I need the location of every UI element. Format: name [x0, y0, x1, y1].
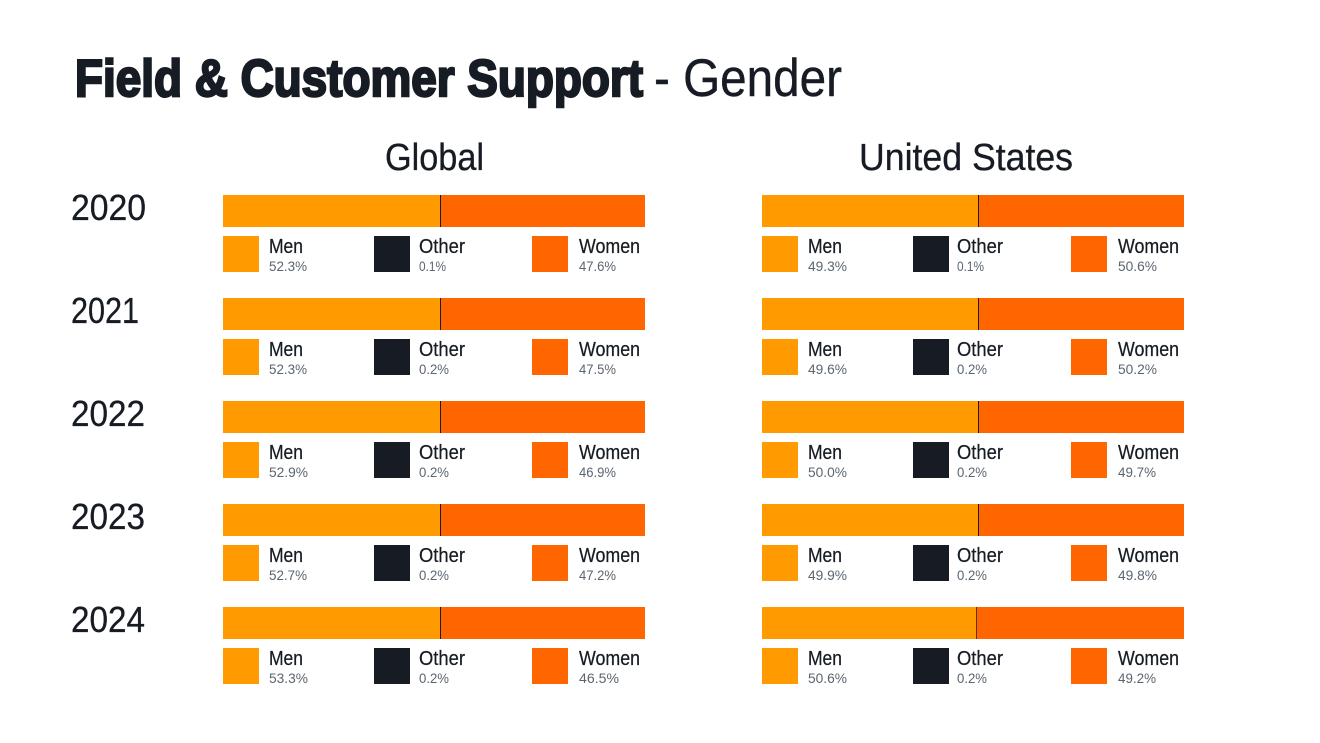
legend: Women: Women	[1118, 442, 1179, 464]
legend: Women	[1071, 339, 1179, 377]
legend: Men: 53.3%	[269, 670, 308, 686]
legend: Other	[913, 236, 1003, 274]
year label 2020: 2020	[71, 187, 146, 228]
stacked bar	[223, 298, 645, 330]
legend: Women	[532, 339, 640, 377]
legend: Other	[913, 339, 1003, 377]
legend: Women: Women	[1118, 236, 1179, 258]
legend: Other: Other	[957, 648, 1003, 670]
legend: Other	[374, 442, 465, 480]
legend: Men	[762, 545, 847, 583]
legend: Women: Women	[579, 236, 640, 258]
legend: Women: 49.8%	[1118, 567, 1157, 583]
legend: Men	[223, 648, 308, 686]
legend: Women: 46.5%	[579, 670, 619, 686]
stacked bar	[762, 504, 1184, 536]
legend: Other: Other	[957, 442, 1003, 464]
legend: Other: 0.1%	[419, 258, 446, 274]
legend: Men: 49.9%	[808, 567, 847, 583]
panel: Global 2022	[223, 401, 645, 480]
legend: Women: Women	[1118, 545, 1179, 567]
legend: Other: 0.2%	[957, 567, 987, 583]
legend: Men: 50.6%	[808, 670, 847, 686]
stacked bar	[762, 298, 1184, 330]
legend: Other: Other	[419, 442, 465, 464]
legend: Other: Other	[957, 545, 1003, 567]
legend: Women: 50.6%	[1118, 258, 1157, 274]
legend: Other: 0.1%	[957, 258, 984, 274]
legend: Other: 0.2%	[957, 464, 987, 480]
panel: Global 2024	[223, 607, 645, 686]
legend: Other: Other	[957, 339, 1003, 361]
legend: Men: 49.6%	[808, 361, 847, 377]
legend: Men: Men	[808, 545, 842, 567]
panel: United States 2024	[762, 607, 1184, 686]
legend: Women	[532, 236, 640, 274]
legend: Other: 0.2%	[419, 670, 449, 686]
legend: Other	[374, 545, 465, 583]
legend: Men	[223, 236, 307, 274]
legend: Women	[532, 648, 640, 686]
legend: Other: Other	[957, 236, 1003, 258]
legend: Women: Women	[1118, 648, 1179, 670]
legend: Men: Men	[269, 236, 303, 258]
stacked bar	[762, 607, 1184, 639]
legend: Men: 52.3%	[269, 361, 307, 377]
legend: Women: 46.9%	[579, 464, 616, 480]
legend: Women: Women	[579, 442, 640, 464]
title: Field & Customer Support	[75, 50, 643, 108]
stacked bar	[223, 195, 645, 227]
panel: Global 2020	[223, 195, 645, 274]
panel: United States 2020	[762, 195, 1184, 274]
legend: Other: 0.2%	[957, 670, 987, 686]
legend: Women: Women	[1118, 339, 1179, 361]
legend: Women: 49.2%	[1118, 670, 1156, 686]
legend: Other	[913, 545, 1003, 583]
legend: Women	[1071, 442, 1179, 480]
legend: Women: Women	[579, 545, 640, 567]
panel: United States 2021	[762, 298, 1184, 377]
title: - Gender	[654, 49, 842, 108]
legend: Other	[913, 648, 1003, 686]
year label 2021: 2021	[71, 290, 139, 331]
legend: Other	[913, 442, 1003, 480]
legend: Men: Men	[269, 648, 303, 670]
legend: Men: Men	[808, 339, 842, 361]
legend: Other: 0.2%	[419, 361, 449, 377]
legend: Men: Men	[269, 339, 303, 361]
legend: Other	[374, 339, 465, 377]
stacked bar	[762, 195, 1184, 227]
legend: Women	[1071, 545, 1179, 583]
legend: Other	[374, 236, 465, 274]
legend: Men	[223, 442, 308, 480]
year label 2024: 2024	[71, 599, 145, 640]
panel: Global 2021	[223, 298, 645, 377]
legend: Women: 50.2%	[1118, 361, 1157, 377]
year label 2023: 2023	[71, 496, 145, 537]
legend: Men: Men	[808, 236, 842, 258]
panel: United States 2023	[762, 504, 1184, 583]
heading: Global: Global	[385, 137, 484, 179]
legend: Men	[223, 339, 307, 377]
legend: Men: Men	[269, 442, 303, 464]
legend: Men: 52.7%	[269, 567, 307, 583]
legend: Men: 52.9%	[269, 464, 308, 480]
legend: Other: Other	[419, 339, 465, 361]
legend: Women	[1071, 236, 1179, 274]
legend: Men: Men	[269, 545, 303, 567]
legend: Other: 0.2%	[419, 464, 449, 480]
stacked bar	[223, 401, 645, 433]
legend: Men	[223, 545, 307, 583]
stacked bar	[223, 504, 645, 536]
legend: Men	[762, 236, 847, 274]
legend: Women: 47.2%	[579, 567, 616, 583]
legend: Men	[762, 442, 847, 480]
legend: Women: Women	[579, 339, 640, 361]
legend: Other: Other	[419, 236, 465, 258]
legend: Other	[374, 648, 465, 686]
panel: Global 2023	[223, 504, 645, 583]
legend: Men: 49.3%	[808, 258, 847, 274]
legend: Men: Men	[808, 648, 842, 670]
year label 2022: 2022	[71, 393, 145, 434]
stacked bar	[223, 607, 645, 639]
legend: Women: 49.7%	[1118, 464, 1156, 480]
legend: Other: 0.2%	[957, 361, 987, 377]
panel: United States 2022	[762, 401, 1184, 480]
legend: Women	[1071, 648, 1179, 686]
legend: Other: 0.2%	[419, 567, 449, 583]
legend: Men: Men	[808, 442, 842, 464]
legend: Women: 47.6%	[579, 258, 616, 274]
legend: Other: Other	[419, 545, 465, 567]
stacked bar	[762, 401, 1184, 433]
legend: Women: Women	[579, 648, 640, 670]
legend: Women: 47.5%	[579, 361, 616, 377]
legend: Men	[762, 339, 847, 377]
legend: Women	[532, 545, 640, 583]
legend: Men: 50.0%	[808, 464, 847, 480]
legend: Men: 52.3%	[269, 258, 307, 274]
legend: Men	[762, 648, 847, 686]
legend: Other: Other	[419, 648, 465, 670]
heading: United States: United States	[859, 137, 1073, 179]
legend: Women	[532, 442, 640, 480]
